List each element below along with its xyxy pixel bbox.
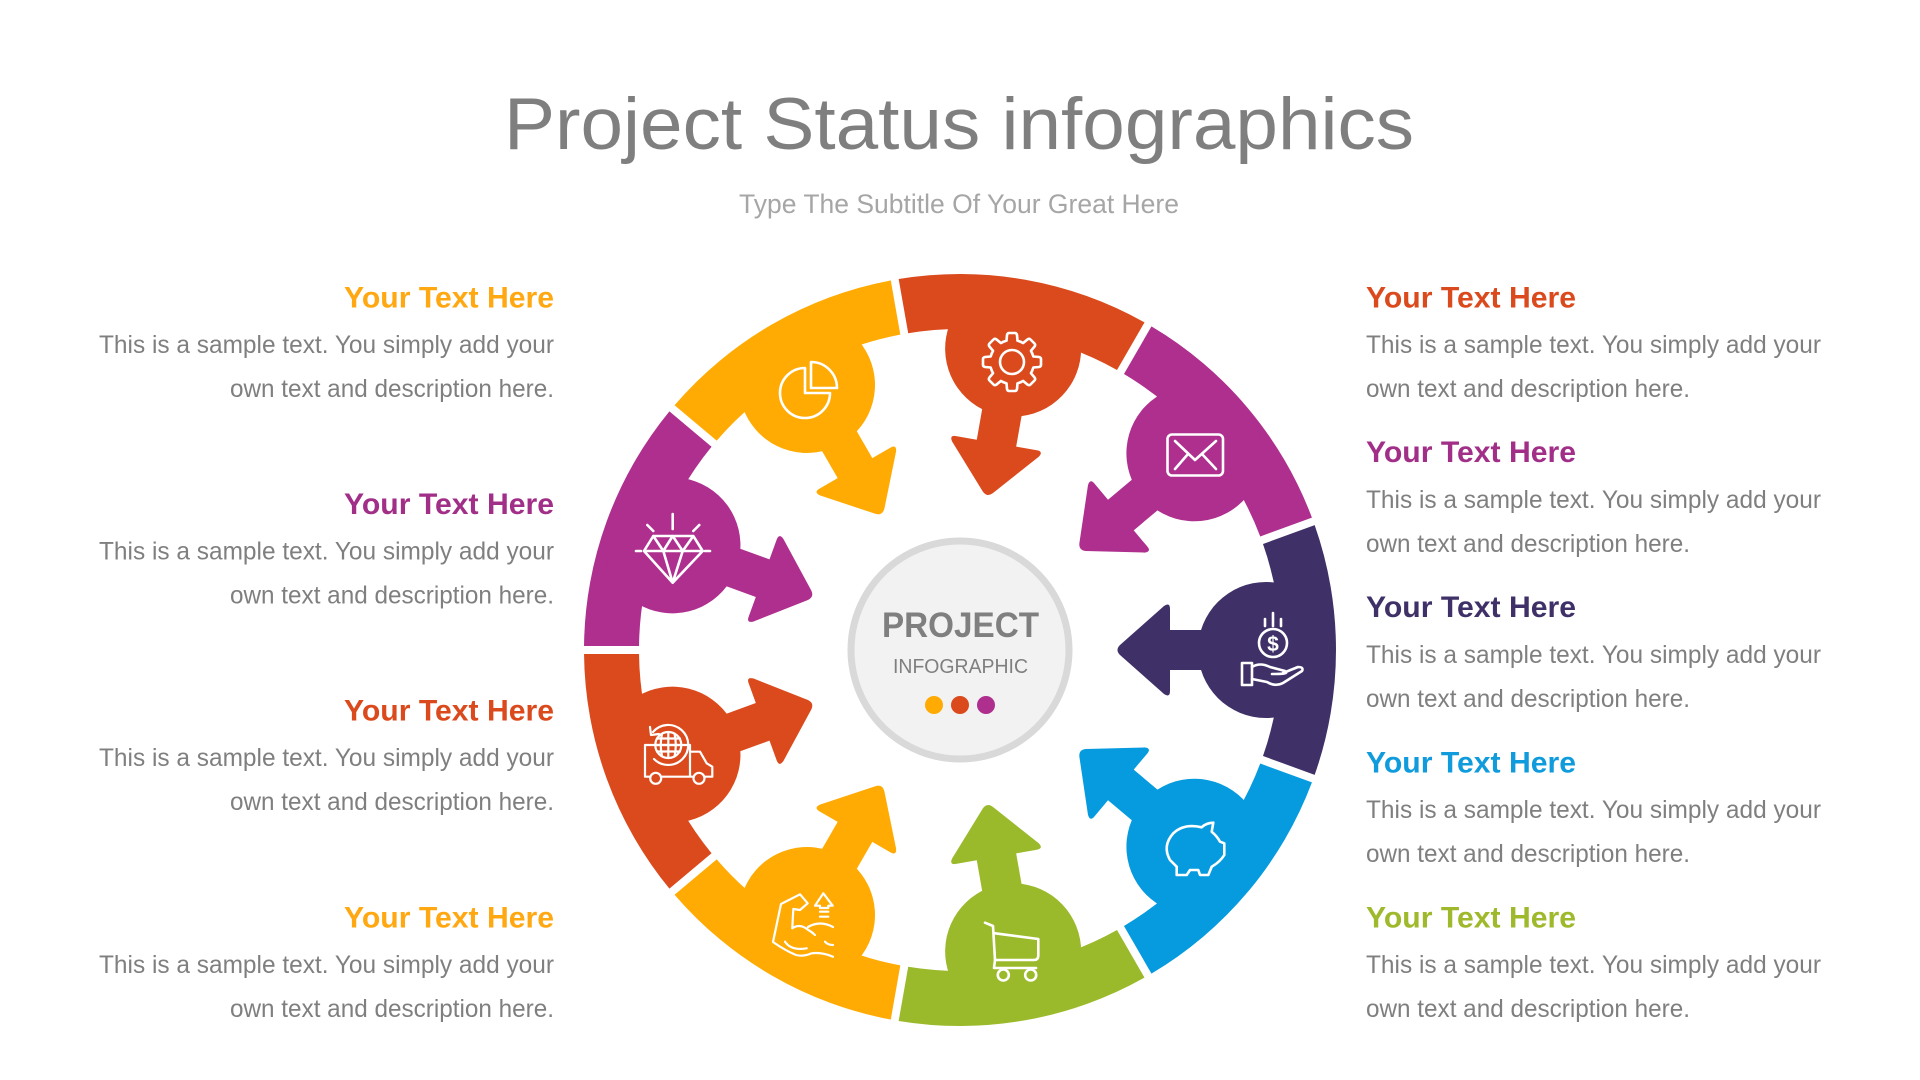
segment: red left with delivery truck [564,587,855,896]
icon: coin over hand [1242,613,1302,685]
right text block 2: own text and description here. [1366,530,1690,558]
icon: envelope [1168,434,1223,476]
right text block 4 [1366,746,1821,868]
segment: purple top-right with envelope [1000,313,1328,644]
ring piece with blob and arrow [664,724,989,1038]
segment: orange top-left with pie chart [664,262,989,576]
ring piece with blob and arrow [564,587,855,896]
icon: muscle with up arrow [773,893,833,957]
left text block 3: This is a sample text. You simply add your [99,744,554,772]
left text block 1: This is a sample text. You simply add your [99,331,554,359]
right text block 1: Your Text Here [1366,282,1576,314]
icon: diamond [636,514,710,583]
left text block 4: Your Text Here [344,902,554,934]
right text block 5: This is a sample text. You simply add your [1366,951,1821,979]
left text block 4: This is a sample text. You simply add your [99,951,554,979]
left text block 1: own text and description here. [230,375,554,403]
left text block 2: This is a sample text. You simply add your [99,538,554,566]
icon: pie chart [780,362,837,418]
segment: green bottom with cart [864,783,1148,1042]
icon: coin over hand: $ [1267,633,1279,656]
right text block 4: Your Text Here [1366,746,1576,780]
center badge [851,541,1069,759]
left text block 4 [99,902,554,1023]
right text block 3 [1366,591,1821,713]
ring piece with blob and arrow [1118,525,1336,775]
right text block 1: This is a sample text. You simply add your [1366,331,1821,359]
right text block 3: Your Text Here [1366,591,1576,624]
segment: blue lower-right with piggy bank [1000,656,1328,987]
badge heading: PROJECT [882,606,1039,645]
right text block 2: Your Text Here [1366,436,1576,469]
segment: red top with gear [864,258,1148,517]
left text block 4: own text and description here. [230,995,554,1023]
segment: purple left with diamond [564,404,855,713]
right text block 1 [1366,282,1821,403]
left text block 2: own text and description here. [230,582,554,610]
segment: orange lower-left with muscle [664,724,989,1038]
right text block 1: own text and description here. [1366,375,1690,403]
badge circle [851,541,1069,759]
icon: truck with globe [645,725,712,784]
left text block 2: Your Text Here [344,488,554,521]
segment: navy right with money hand [1118,525,1336,775]
left text block 1: Your Text Here [344,282,554,314]
icon: gear [983,333,1041,391]
left text block 2 [99,488,554,610]
ring piece with blob and arrow [1000,313,1328,644]
right text block 2 [1366,436,1821,558]
ring piece with blob and arrow [564,404,855,713]
subtitle: Type The Subtitle Of Your Great Here [739,189,1179,219]
left text block 3: own text and description here. [230,788,554,816]
right text block 4: This is a sample text. You simply add your [1366,796,1821,824]
badge subheading: INFOGRAPHIC [893,655,1028,678]
left text block 3 [99,694,554,816]
right text block 4: own text and description here. [1366,840,1690,868]
icon: piggy bank [1167,823,1224,875]
right text block 2: This is a sample text. You simply add your [1366,486,1821,514]
icon: shopping cart [985,923,1038,980]
right text block 3: own text and description here. [1366,685,1690,713]
left text block 3: Your Text Here [344,694,554,728]
ring piece with blob and arrow [864,783,1148,1042]
right text block 5: Your Text Here [1366,902,1576,934]
right text block 3: This is a sample text. You simply add your [1366,641,1821,669]
right text block 5: own text and description here. [1366,995,1690,1023]
ring piece with blob and arrow [1000,656,1328,987]
ring piece with blob and arrow [864,258,1148,517]
ring piece with blob and arrow [664,262,989,576]
title: Project Status infographics [504,84,1414,165]
left text block 1 [99,282,554,403]
right text block 5 [1366,902,1821,1023]
badge dots [925,696,995,714]
